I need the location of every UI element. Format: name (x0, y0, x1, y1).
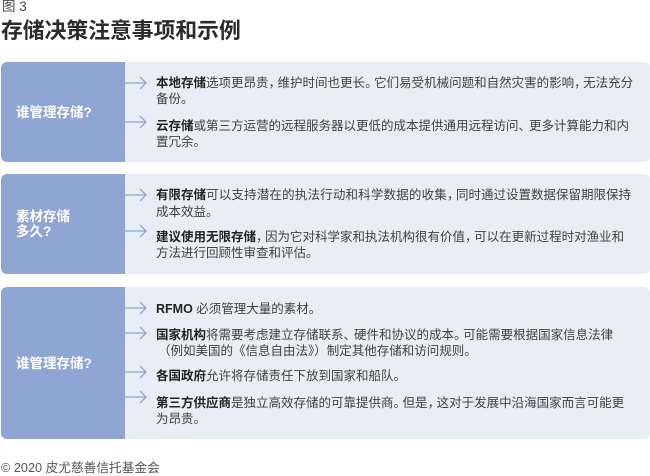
panel: who manages storage 1 (1, 62, 650, 162)
arrow 2 (125, 116, 147, 128)
side heading: how long: 素材存储 (16, 209, 70, 224)
text: third party: 为昂贵。 (156, 412, 206, 426)
side heading: who manages storage (1, 62, 125, 162)
text: cloud storage: 云存储或第三方运营的远程服务器以更低的成本提供通用远程访问、更多计算能力和内 (156, 119, 629, 133)
panel: who manages storage 2 (1, 287, 650, 439)
text: local storage: 本地存储选项更昂贵，维护时间也更长。它们易受机械问题和自然灾害的影响，无法充分 (156, 76, 633, 90)
text: RFMO: RFMO 必须管理大量的素材。 (156, 302, 321, 316)
title: 存储决策注意事项和示例 (1, 18, 241, 43)
arrow 7 (125, 366, 147, 378)
arrow 8 (125, 390, 147, 404)
arrow 6 (125, 326, 147, 340)
text: cloud storage: 置冗余。 (156, 134, 206, 148)
text: unlimited storage (156, 230, 624, 260)
copyright footer: © 2020 皮尤慈善信托基金会 (1, 461, 160, 475)
arrow 4 (125, 224, 147, 238)
text: unlimited storage: 建议使用无限存储，因为它对科学家和执法机构很有价值，可以在更新过程时对渔业和 (156, 230, 624, 244)
text: national agencies: 国家机构将需要考虑建立存储联系、硬件和协议的成本。可能需要根据国家信息法律 (156, 328, 613, 342)
text: cloud storage (156, 119, 629, 148)
text: third party (156, 396, 624, 426)
text: unlimited storage: 方法进行回顾性审查和评估。 (156, 246, 319, 260)
side heading: who manages storage: 谁管理存储? (16, 356, 92, 371)
text: national agencies: （例如美国的《信息自由法》）制定其他存储和访问规则。 (158, 344, 477, 358)
side heading: how long: 多久? (16, 224, 51, 239)
arrow 1 (125, 76, 147, 90)
arrow 5 (125, 302, 147, 314)
text: limited storage: 有限存储可以支持潜在的执法行动和科学数据的收集，同时通过设置数据保留期限保持 (156, 188, 631, 202)
text: limited storage (156, 188, 631, 218)
text: national agencies (156, 328, 613, 358)
side heading: who manages storage: 谁管理存储? (16, 105, 92, 120)
arrow 3 (125, 188, 147, 202)
side heading: who manages storage (1, 287, 125, 439)
text: local storage: 备份。 (156, 92, 194, 106)
side heading: how long (1, 174, 125, 274)
text: governments: 各国政府允许将存储责任下放到国家和船队。 (156, 369, 406, 383)
text: third party: 第三方供应商是独立高效存储的可靠提供商。但是，这对于发展中沿海国家而言可能更 (156, 396, 624, 410)
text: local storage (156, 76, 633, 106)
text: limited storage: 成本效益。 (156, 204, 219, 218)
panel: how long to store (1, 174, 650, 274)
